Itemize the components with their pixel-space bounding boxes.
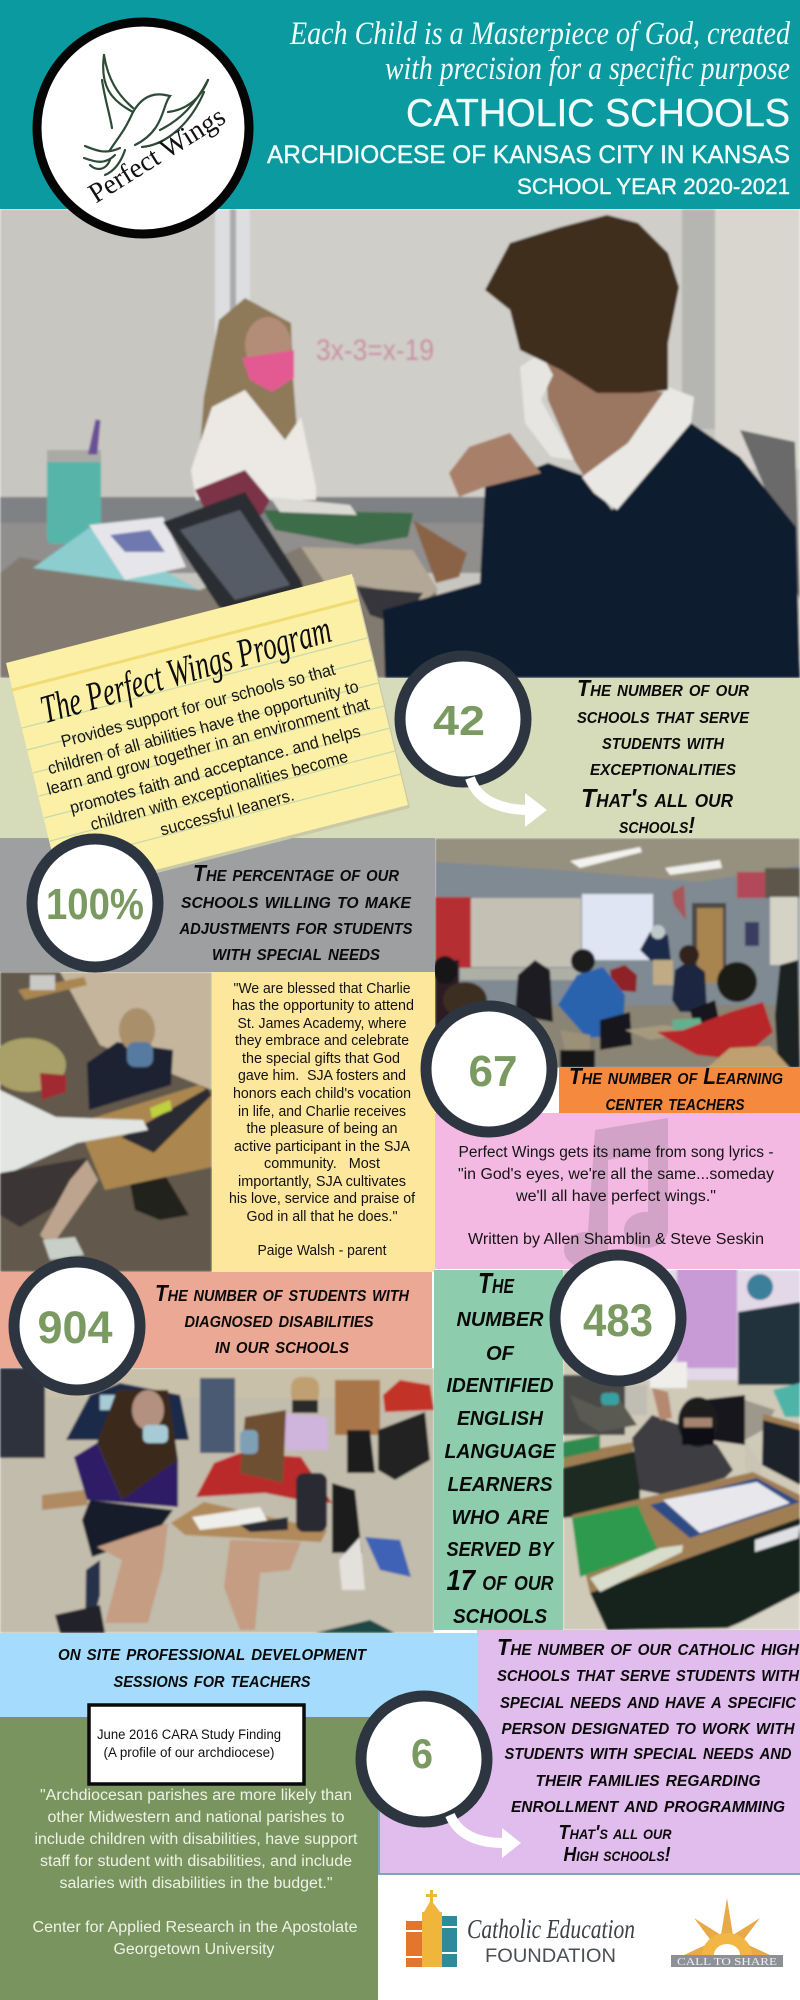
panel: parent quote: Paige Walsh - parent	[258, 1243, 386, 1259]
logo: Catholic Education Foundation	[406, 1890, 635, 1967]
card: The Perfect Wings Program note: learn and grow together in an environment that	[45, 694, 372, 799]
panel: parent quote: the special gifts that God	[242, 1051, 400, 1067]
panel: parent quote: honors each child's vocation	[233, 1086, 411, 1102]
panel: high schools: That's all our	[558, 1822, 672, 1844]
panel: teal header: SCHOOL YEAR 2020-2021	[517, 174, 790, 199]
card: The Perfect Wings Program note: promotes faith and acceptance. and helps	[68, 721, 362, 817]
panel: English language learners: language	[444, 1433, 556, 1465]
panel: English language learners: 17 of our	[446, 1565, 554, 1597]
stat: 100 percent: The percentage of our	[193, 860, 399, 886]
panel: high schools: their families regarding	[536, 1765, 760, 1791]
panel: students with disabilities label: diagnosed disabilities	[184, 1306, 374, 1332]
card: The Perfect Wings Program note: The Perfect Wings Program	[35, 606, 336, 732]
photo: students at whiteboard table	[0, 209, 800, 678]
logo: Call to Share: CALL TO SHARE	[677, 1956, 777, 1968]
arrow: 42 to that's all	[470, 778, 547, 827]
panel: English language learners: The	[478, 1268, 515, 1300]
panel: parent quote: "We are blessed that Charlie	[234, 981, 410, 997]
panel: parent quote	[212, 972, 435, 1272]
stat: 67 teachers	[426, 1006, 552, 1132]
panel: professional development: sessions for teachers	[114, 1666, 311, 1692]
panel: English language learners: of	[486, 1335, 515, 1367]
photo: students at whiteboard table: 3x-3=x-19	[316, 334, 434, 367]
panel: parent quote: importantly, SJA cultivates	[238, 1174, 406, 1190]
panel: CARA study finding: salaries with disabilities in the budget."	[60, 1875, 332, 1892]
panel: professional development	[0, 1633, 477, 1717]
stat: 67 teachers: 67	[468, 1047, 518, 1096]
photo: two students at a desk with tablet	[0, 972, 212, 1272]
panel: students with disabilities label	[0, 1272, 432, 1368]
panel: English language learners	[434, 1268, 563, 1630]
logo: Catholic Education Foundation: FOUNDATION	[485, 1946, 616, 1967]
panel: CARA study finding: "Archdiocesan parishes are more likely than	[40, 1787, 352, 1804]
stat: 42 schools: schools that serve	[577, 702, 750, 728]
stat: 42 schools	[400, 656, 750, 838]
stat: 100 percent: with special needs	[212, 939, 380, 965]
panel: CARA study finding: include children with disabilities, have support	[34, 1831, 358, 1848]
card: The Perfect Wings Program note: Provides support for our schools so that	[59, 660, 338, 751]
panel: parent quote: has the opportunity to attend	[232, 998, 414, 1014]
panel: high schools	[378, 1630, 800, 1875]
card: The Perfect Wings Program note	[6, 574, 410, 897]
icon: dove	[84, 55, 208, 175]
panel: parent quote: the pleasure of being an	[246, 1121, 398, 1137]
panel: learning center teachers label: center teachers	[606, 1089, 745, 1115]
stat: 100 percent: schools willing to make	[181, 887, 412, 913]
stat: 42 schools: exceptionalities	[590, 754, 736, 780]
panel: high schools: enrollment and programming	[511, 1791, 785, 1817]
panel: teal header: ARCHDIOCESE OF KANSAS CITY IN KANSAS	[267, 141, 790, 169]
panel: parent quote: community. Most	[264, 1156, 380, 1172]
card: The Perfect Wings Program note: successful leaners.	[158, 785, 296, 840]
photo: classroom with teacher	[433, 838, 800, 1068]
panel: song lyrics: Written by Allen Shamblin & Steve Seskin	[468, 1231, 764, 1248]
logo: Call to Share	[671, 1898, 783, 1968]
stat: 483 learners	[555, 1255, 681, 1381]
panel: parent quote: they embrace and celebrate	[235, 1033, 409, 1049]
panel: students with disabilities label: The number of students with	[155, 1280, 409, 1306]
stat: 6 high schools	[361, 1696, 521, 1858]
panel: CARA study finding: other Midwestern and national parishes to	[48, 1809, 344, 1826]
stat: 100 percent: adjustments for students	[179, 913, 413, 939]
photo: students raising hands at desks	[563, 1268, 800, 1630]
icon: music note watermark	[564, 1118, 668, 1268]
card: The Perfect Wings Program note: children with exceptionalities become	[88, 747, 350, 834]
panel: English language learners: learners	[448, 1466, 553, 1498]
panel: learning center teachers label	[559, 1063, 800, 1115]
panel: song lyrics	[435, 1113, 800, 1269]
panel: parent quote: God in all that he does."	[246, 1209, 398, 1225]
stat: 42 schools: 42	[433, 697, 485, 744]
panel: learning center teachers label: The number of Learning	[569, 1063, 783, 1089]
stat: 42 schools: schools!	[619, 812, 695, 838]
panel: parent quote: gave him. SJA fosters and	[238, 1068, 406, 1084]
callout: study title box: (A profile of our archdiocese)	[104, 1745, 274, 1760]
panel: CARA study finding	[0, 1717, 378, 2000]
panel: teal header: CATHOLIC SCHOOLS	[406, 92, 790, 135]
logo: Perfect Wings dove badge: Perfect Wings	[83, 101, 231, 210]
panel: parent quote: in life, and Charlie receives	[238, 1104, 406, 1120]
panel: English language learners: who are	[452, 1499, 549, 1531]
card: The Perfect Wings Program note: children of all abilities have the opportunity to	[46, 677, 361, 778]
panel: CARA study finding: staff for student with disabilities, and include	[40, 1853, 352, 1870]
photo: students at desks	[0, 1368, 434, 1633]
logo: Perfect Wings dove badge	[37, 22, 249, 234]
panel: parent quote: St. James Academy, where	[238, 1016, 406, 1032]
band: grey stat background	[0, 838, 435, 972]
panel: teal header	[0, 0, 800, 209]
stat: 100 percent: 100%	[46, 880, 144, 929]
logo: Catholic Education Foundation: Catholic Education	[467, 1914, 635, 1944]
stat: 42 schools: That's all our	[581, 783, 733, 813]
panel: English language learners: identified	[446, 1367, 554, 1399]
panel: English language learners: number	[456, 1301, 544, 1333]
band: sage green stat background	[0, 678, 800, 838]
stat: 100 percent	[32, 839, 413, 967]
panel: professional development: on site professional development	[58, 1639, 367, 1665]
stat: 483 learners: 483	[583, 1295, 653, 1346]
stat: 42 schools: students with	[602, 728, 724, 754]
panel: high schools: High schools!	[564, 1844, 671, 1866]
panel: English language learners: schools	[453, 1598, 548, 1630]
panel: parent quote: active participant in the SJA	[234, 1139, 410, 1155]
stat: 904 students	[14, 1262, 140, 1390]
panel: CARA study finding: Georgetown University	[114, 1941, 275, 1958]
panel: song lyrics: Perfect Wings gets its name from song lyrics -	[458, 1144, 774, 1161]
callout: study title box	[89, 1705, 304, 1784]
callout: study title box: June 2016 CARA Study Finding	[97, 1727, 281, 1742]
panel: song lyrics: "in God's eyes, we're all the same...someday	[458, 1166, 774, 1183]
panel: English language learners: english	[457, 1400, 544, 1432]
stat: 42 schools: The number of our	[577, 675, 749, 701]
panel: CARA study finding: Center for Applied Research in the Apostolate	[32, 1919, 358, 1936]
panel: parent quote: his love, service and praise of	[229, 1191, 416, 1207]
panel: students with disabilities label: in our schools	[215, 1332, 349, 1358]
panel: song lyrics: we'll all have perfect wings."	[515, 1188, 716, 1205]
arrow: 6 to all high schools	[450, 1815, 521, 1858]
stat: 6 high schools: 6	[411, 1730, 433, 1777]
panel: English language learners: served by	[446, 1531, 555, 1563]
stat: 904 students: 904	[38, 1302, 112, 1353]
